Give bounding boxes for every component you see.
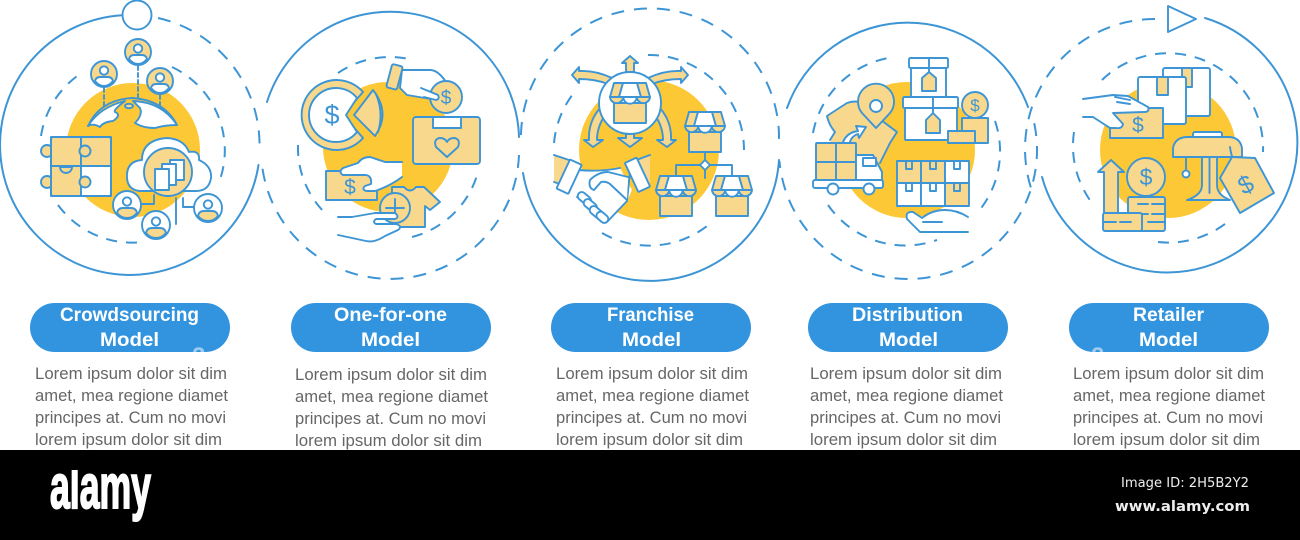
text block: lorem ipsum dolor sit dim <box>810 430 997 449</box>
yellow disc <box>1100 82 1236 218</box>
pill heading: Crowdsourcing <box>60 305 199 326</box>
text block: amet, mea regione diamet <box>556 386 749 405</box>
text block: principes at. Cum no movi <box>295 409 486 428</box>
text block: Lorem ipsum dolor sit dim <box>810 364 1002 383</box>
inner dashed ring <box>298 57 478 237</box>
icon: puzzle <box>41 137 111 196</box>
icon: hand with banknote: $ <box>344 176 356 199</box>
panel: crowdsourcing circle <box>0 0 260 275</box>
icon: cardboard boxes <box>1138 68 1210 124</box>
panel: retailer circle <box>1025 6 1297 272</box>
pill heading: Model <box>1139 330 1198 351</box>
outer ring <box>780 23 1037 279</box>
yellow disc <box>66 83 200 217</box>
alamy logo: alamy <box>50 453 151 522</box>
text block <box>556 364 749 449</box>
pill heading <box>1069 303 1269 352</box>
icon: table lamp <box>1173 132 1242 200</box>
text block: Lorem ipsum dolor sit dim <box>1073 364 1264 383</box>
start marker circle <box>122 0 152 30</box>
text block <box>810 364 1003 449</box>
inner dashed ring <box>554 55 744 246</box>
text block: Lorem ipsum dolor sit dim <box>295 365 487 384</box>
pill heading: Model <box>622 330 681 351</box>
text block: principes at. Cum no movi <box>556 408 747 427</box>
text block: amet, mea regione diamet <box>295 387 488 406</box>
text block: lorem ipsum dolor sit dim <box>556 430 743 449</box>
panel: crowdsourcing label <box>30 303 230 449</box>
text block: principes at. Cum no movi <box>1073 408 1263 427</box>
end marker triangle <box>1168 6 1196 32</box>
icon: connected users <box>113 191 222 239</box>
icon: growth arrow and coins: $ <box>1140 164 1153 190</box>
footer bar <box>0 450 1300 540</box>
icon: giving hand <box>338 213 400 241</box>
icon: supporting hand <box>907 210 968 232</box>
icon: hand with coin: $ <box>441 88 452 109</box>
icon: hand with coin <box>386 64 462 113</box>
pill heading: One-for-one <box>334 305 447 326</box>
inner dashed ring <box>41 67 225 243</box>
icon: delivery map and pin <box>827 84 897 163</box>
inner dashed ring <box>813 57 1000 246</box>
pill heading: Model <box>100 330 159 351</box>
icon: stacked parcels <box>897 161 969 206</box>
panel: retailer label <box>1069 303 1269 449</box>
icon: hand paying banknote <box>1083 95 1163 138</box>
icon: people above globe <box>91 39 173 107</box>
text block <box>295 365 488 450</box>
icon: growth arrow and coins <box>1098 158 1165 231</box>
pill heading: Retailer <box>1133 305 1205 326</box>
inner dashed ring <box>1073 53 1263 243</box>
icon: price tag: $ <box>1233 169 1259 201</box>
text block: principes at. Cum no movi <box>35 408 226 427</box>
text block: lorem ipsum dolor sit dim <box>1073 430 1260 449</box>
panel: distribution circle <box>780 23 1037 279</box>
icon: hand with banknote <box>326 157 402 200</box>
outer ring <box>262 12 519 279</box>
panel: franchise label <box>551 303 751 449</box>
yellow disc <box>839 82 975 218</box>
icon: donation box <box>413 117 480 164</box>
icon: globe <box>88 98 177 128</box>
text block: Lorem ipsum dolor sit dim <box>35 364 227 383</box>
pill heading: Model <box>361 330 420 351</box>
text block: Lorem ipsum dolor sit dim <box>556 364 748 383</box>
panel: one-for-one circle <box>262 12 519 279</box>
icon: handshake <box>554 155 650 225</box>
pill heading <box>30 303 230 352</box>
icon: coin pie: $ <box>324 100 340 130</box>
text block: lorem ipsum dolor sit dim <box>35 430 222 449</box>
website: www.alamy.com <box>1115 499 1250 515</box>
icon: arrows out of shop <box>572 56 688 147</box>
icon: gift boxes with tags <box>903 58 958 140</box>
icon: t-shirt with plus <box>380 187 440 227</box>
icon: coin pie <box>302 80 383 150</box>
panel: one-for-one label <box>291 303 491 450</box>
pill heading: Model <box>879 330 938 351</box>
pill heading: 2 <box>192 343 205 370</box>
image id: Image ID: 2H5B2Y2 <box>1121 476 1249 491</box>
panel: distribution label <box>808 303 1008 449</box>
outer ring <box>521 8 779 281</box>
outer ring <box>1025 18 1297 272</box>
icon: coin on boxes: $ <box>970 96 980 115</box>
pill heading <box>291 303 491 352</box>
text block: lorem ipsum dolor sit dim <box>295 431 482 450</box>
yellow disc <box>323 82 453 212</box>
text block: amet, mea regione diamet <box>810 386 1003 405</box>
pill heading <box>551 303 751 352</box>
text block: principes at. Cum no movi <box>810 408 1001 427</box>
text block <box>1073 364 1265 449</box>
pill heading: Distribution <box>852 305 963 326</box>
pill heading <box>808 303 1008 352</box>
text block: amet, mea regione diamet <box>35 386 228 405</box>
icon: delivery truck <box>813 126 883 194</box>
yellow disc <box>579 80 719 220</box>
icon: central shop <box>599 72 661 134</box>
pill heading: Franchise <box>607 305 694 326</box>
icon: coin on boxes <box>948 92 988 143</box>
panel: franchise circle <box>521 8 779 281</box>
icon: franchise shop network <box>656 112 752 216</box>
icon: hand paying banknote: $ <box>1132 114 1144 137</box>
icon: cloud with documents <box>127 138 211 196</box>
text block: amet, mea regione diamet <box>1073 386 1265 405</box>
outer ring <box>0 15 260 275</box>
pill heading: 2 <box>1091 343 1104 370</box>
text block <box>35 364 228 449</box>
icon: price tag <box>1220 147 1274 213</box>
